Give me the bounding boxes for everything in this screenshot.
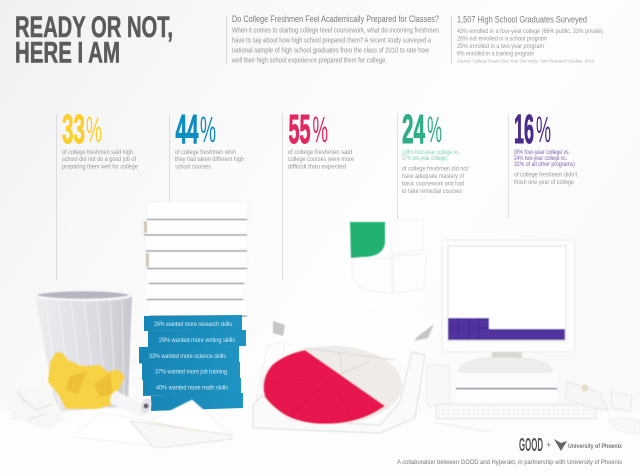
monitor with purple bar chart bbox=[442, 240, 575, 374]
stat: 55%: % bbox=[312, 109, 328, 150]
title: HERE I AM bbox=[15, 36, 120, 70]
stat: 24%: 37% two-year college) bbox=[402, 156, 447, 162]
paper roll bbox=[108, 389, 153, 417]
text block: survey: 6% enrolled in a training program bbox=[457, 50, 534, 58]
logos: + bbox=[546, 440, 551, 450]
book label: job training: 37% wanted more job training bbox=[155, 368, 227, 376]
text block: survey bbox=[451, 14, 603, 64]
stat: 33%: preparing them well for college bbox=[62, 164, 138, 170]
pizza box with pie chart bbox=[253, 308, 436, 433]
stat: 44%: % bbox=[200, 109, 216, 150]
stat: 33%: of college freshmen said high bbox=[62, 149, 133, 156]
stat: 55%: 55 bbox=[288, 106, 310, 152]
stat: 24%: have adequate mastery of bbox=[402, 173, 464, 180]
text block: survey: Source: College Board One Year Out study, Hart Research Studies, 2010 bbox=[457, 58, 594, 64]
text block: survey: 25% enrolled in a two-year program bbox=[457, 43, 544, 50]
stat: 24%: basic coursework and had bbox=[402, 180, 464, 188]
stat: 24%: of college freshmen did not bbox=[402, 166, 468, 172]
book label: research skills: 26% wanted more research skills bbox=[154, 321, 232, 328]
text block: intro: Do College Freshmen Feel Academically Prepared for Classes? bbox=[232, 14, 439, 24]
stat: 44% bbox=[169, 106, 244, 279]
logos bbox=[519, 435, 622, 455]
text block: intro: have to say about how high school prepared them? A recent study surveyed a bbox=[232, 38, 431, 44]
stat: 24%: to take remedial courses bbox=[402, 188, 462, 195]
stat: 44%: they had taken different high bbox=[175, 156, 244, 163]
stack of white books bbox=[143, 202, 248, 316]
red pie slice bbox=[264, 350, 385, 424]
crumpled paper bbox=[6, 383, 66, 430]
stat: 33% bbox=[56, 106, 138, 280]
stat: 24%: % bbox=[427, 109, 442, 150]
text block: intro: national sample of high school graduates from the class of 2010 to rate how bbox=[232, 48, 430, 54]
text block: intro: well their high school experience prepared them for college. bbox=[231, 58, 387, 64]
stat: 55%: of college freshmen said bbox=[288, 149, 352, 156]
stat: 55% bbox=[282, 106, 354, 279]
stat: 16%: % bbox=[536, 109, 551, 150]
text block: survey: 43% enrolled in a four-year college (66% public, 33% private) bbox=[457, 28, 603, 35]
logos: University of Phoenix bbox=[568, 443, 622, 450]
text block: intro: When it comes to starting college level coursework, what do incoming freshmen bbox=[232, 28, 439, 34]
notebook and papers bbox=[73, 400, 232, 448]
book label: writing skills: 29% wanted more writing skills bbox=[159, 337, 235, 344]
title bbox=[15, 11, 173, 70]
stat: 16%: 24% two-year college vs. bbox=[514, 156, 567, 162]
bar chart: bottom row bbox=[448, 328, 565, 340]
stat: 24% bbox=[397, 106, 468, 219]
sticky notes bbox=[350, 220, 427, 293]
bar chart: top row bbox=[448, 318, 489, 328]
stat: 24%: 24 bbox=[402, 106, 425, 152]
stat: 16%: 16 bbox=[514, 106, 534, 152]
stat: 16%: of college freshmen didn't bbox=[514, 172, 577, 178]
stat: 44%: 44 bbox=[176, 106, 199, 152]
icon: phoenix bbox=[554, 439, 567, 451]
text block: survey: 1,507 High School Graduates Surveyed bbox=[457, 14, 587, 24]
desk objects: books, cup, keyboard, tape, stapler, mouse bbox=[427, 365, 640, 433]
stat: 55%: college courses were more bbox=[288, 156, 354, 163]
stat: 44%: school courses bbox=[175, 164, 211, 170]
stat: 33%: 33 bbox=[62, 106, 85, 152]
wastebasket with yellow paper bbox=[35, 290, 132, 412]
text block: survey: 26% not enrolled in a school program bbox=[457, 36, 547, 42]
stat: 55%: difficult than expected bbox=[288, 164, 346, 170]
stat: 33%: % bbox=[86, 109, 102, 150]
stat: 33%: school did not do a good job of bbox=[62, 156, 136, 163]
logos: GOOD bbox=[519, 435, 543, 455]
title: READY OR NOT, bbox=[15, 11, 173, 44]
stat: 16%: (9% four-year college vs. bbox=[514, 150, 570, 156]
text block: intro bbox=[226, 14, 439, 64]
stat: 44%: of college freshmen wish bbox=[175, 149, 236, 156]
stat: 16%: finish one year of college bbox=[514, 179, 574, 186]
stat: 24%: (18% four-year college vs. bbox=[402, 150, 460, 156]
stack of blue books bbox=[139, 315, 246, 411]
stat: 16%: 32% of all other programs) bbox=[514, 162, 575, 168]
book label: math skills: 40% wanted more math skills bbox=[156, 384, 228, 392]
footer credit: A collaboration between GOOD and Hyperakt, in partnership with University of Phoenix bbox=[397, 459, 623, 466]
book label: science skills: 33% wanted more science skills bbox=[149, 353, 226, 360]
stat: 16% bbox=[508, 106, 577, 219]
green note bbox=[350, 222, 385, 258]
